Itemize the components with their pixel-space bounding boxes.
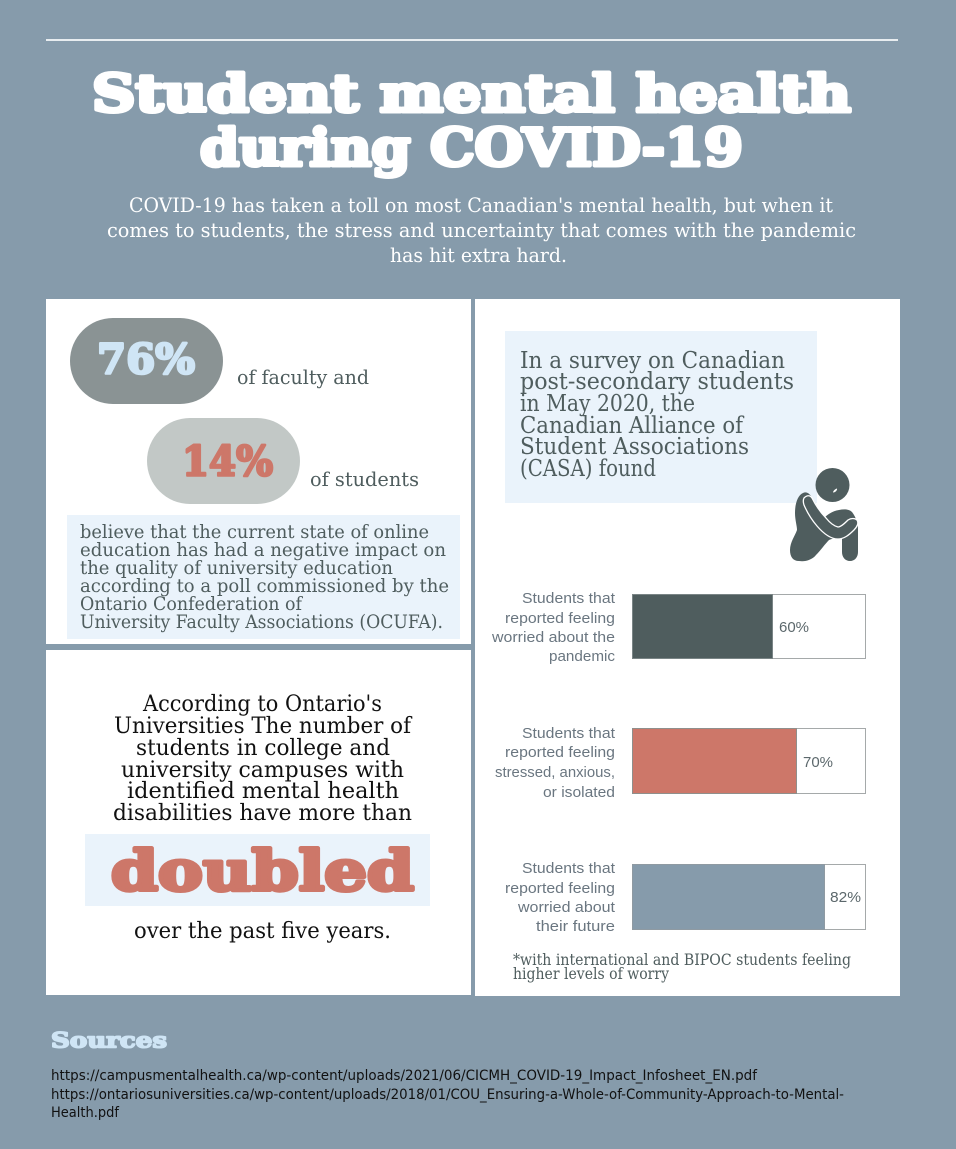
- poll description: [67, 515, 460, 639]
- bar: worried about their future: their future: [536, 918, 615, 935]
- poll description: education has had a negative impact on: [80, 539, 446, 561]
- bar: worried about their future: Students that: [522, 860, 616, 877]
- title: Student mental health: [92, 64, 851, 124]
- survey intro: Canadian Alliance of: [520, 413, 744, 439]
- intro text: has hit extra hard.: [390, 244, 567, 267]
- 76% pill: [70, 318, 223, 404]
- title: [92, 64, 851, 178]
- bar: worried about the pandemic: reported feeling: [505, 610, 615, 627]
- survey intro: In a survey on Canadian: [520, 348, 785, 374]
- icon: sad seated person: [790, 468, 858, 561]
- poll description: University Faculty Associations (OCUFA).: [80, 611, 443, 633]
- disabilities text: students in college and: [136, 736, 390, 761]
- poll description: the quality of university education: [80, 557, 393, 579]
- bar: worried about the pandemic: [491, 590, 866, 665]
- 76% pill: 76%: [97, 336, 195, 384]
- bar: stressed, anxious, or isolated: [495, 725, 866, 801]
- bar: stressed, anxious, or isolated: 70%: [803, 754, 833, 771]
- text: of faculty and: of faculty and: [237, 365, 369, 389]
- bar: worried about their future: [505, 860, 866, 935]
- bar: worried about their future: reported feeling: [505, 880, 615, 897]
- survey intro: Student Associations: [520, 434, 749, 460]
- disabilities text: university campuses with: [121, 758, 404, 783]
- bar: stressed, anxious, or isolated: Students that: [522, 725, 616, 742]
- footnote: *with international and BIPOC students feeling: [513, 950, 851, 969]
- footnote: [513, 950, 851, 983]
- intro text: comes to students, the stress and uncertainty that comes with the pandemic: [107, 219, 856, 242]
- panel: CASA survey: [475, 299, 900, 996]
- panel: mental health disabilities: [46, 650, 471, 995]
- footnote: higher levels of worry: [513, 964, 669, 983]
- disabilities text: identified mental health: [127, 779, 399, 804]
- source links: https://ontariosuniversities.ca/wp-content/uploads/2018/01/COU_Ensuring-a-Whole-of-Community-Approach-to-Mental-: [51, 1087, 844, 1103]
- survey intro: (CASA) found: [520, 456, 656, 482]
- source links: Health.pdf: [51, 1105, 120, 1121]
- sources heading: Sources: [51, 1028, 167, 1052]
- doubled callout: [85, 834, 430, 906]
- poll description: according to a poll commissioned by the: [80, 575, 449, 597]
- disabilities text: According to Ontario's: [142, 692, 382, 717]
- bar: stressed, anxious, or isolated: or isolated: [543, 784, 615, 801]
- bar: worried about the pandemic: Students that: [522, 590, 616, 607]
- bar: worried about the pandemic: 60%: [779, 619, 809, 636]
- title: during COVID-19: [200, 118, 743, 178]
- intro text: [107, 194, 856, 267]
- survey intro: [505, 331, 817, 503]
- disabilities text: [113, 692, 413, 826]
- poll description: believe that the current state of online: [80, 521, 429, 543]
- text: of students: of students: [310, 467, 419, 491]
- poll description: Ontario Confederation of: [80, 593, 304, 615]
- source links: https://campusmentalhealth.ca/wp-content/uploads/2021/06/CICMH_COVID-19_Impact_Infosheet_EN.pdf: [51, 1068, 758, 1084]
- bar: worried about their future: worried about: [517, 899, 616, 916]
- 14% pill: 14%: [182, 438, 273, 486]
- bar: stressed, anxious, or isolated: stressed, anxious,: [495, 764, 615, 781]
- survey intro: in May 2020, the: [520, 391, 695, 417]
- survey intro: post-secondary students: [520, 369, 794, 395]
- doubled callout: doubled: [111, 838, 414, 903]
- source links: [51, 1068, 844, 1121]
- bar: stressed, anxious, or isolated: reported feeling: [505, 744, 615, 761]
- panel: online education poll: [46, 299, 471, 644]
- bar: worried about their future: 82%: [830, 889, 861, 906]
- intro text: COVID-19 has taken a toll on most Canadian's mental health, but when it: [129, 194, 833, 217]
- disabilities text: disabilities have more than: [113, 801, 412, 826]
- bar: worried about the pandemic: pandemic: [549, 648, 615, 665]
- closing text: over the past five years.: [134, 919, 391, 944]
- bar: worried about the pandemic: worried about the: [491, 629, 615, 646]
- disabilities text: Universities The number of: [114, 714, 413, 739]
- 14% pill: [147, 418, 300, 504]
